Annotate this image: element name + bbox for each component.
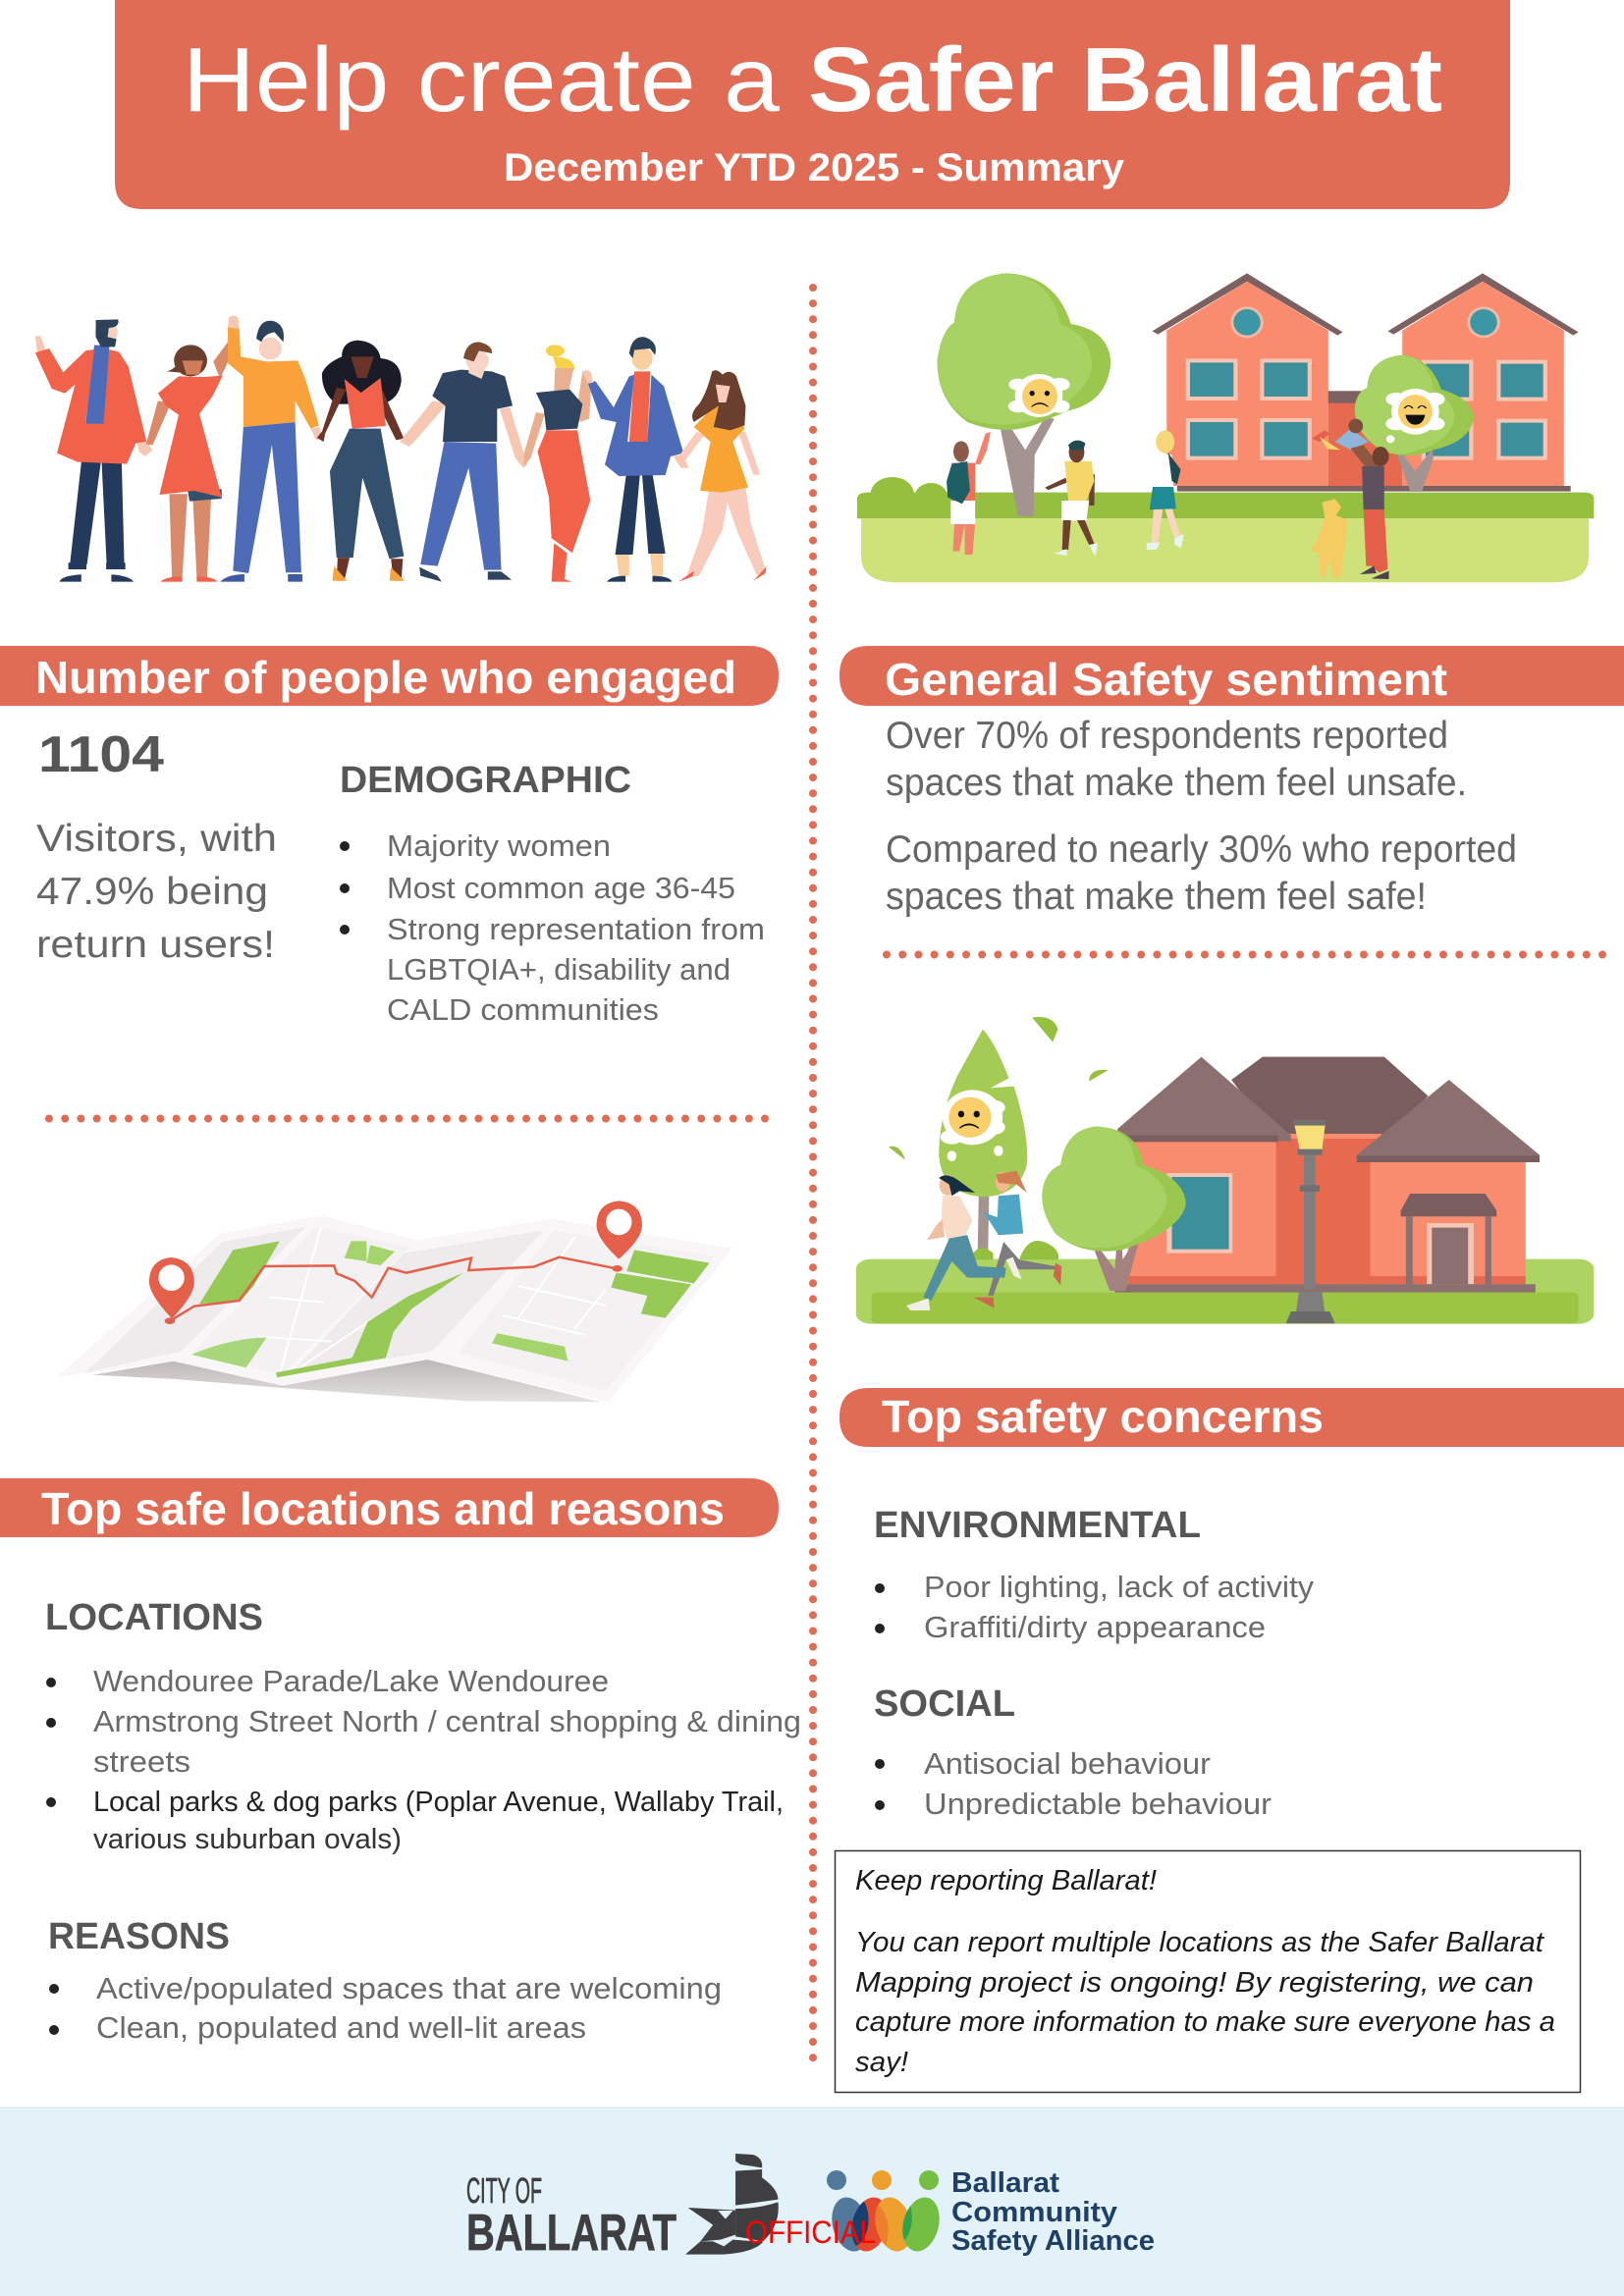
ground [857,477,1594,582]
reasons list: Active/populated spaces that are welcoming [96,1971,722,2005]
environmental concerns: Graffiti/dirty appearance [924,1610,1266,1644]
reasons list: REASONS [48,1916,230,1957]
callout: keep reporting [835,1851,1581,2093]
subtitle: December YTD 2025 - Summary [504,146,1125,189]
title: Help create a [183,28,780,131]
header banner [115,0,1510,209]
demographic list: LGBTQIA+, disability and [387,952,731,987]
locations list: Armstrong Street North / central shopping & dining [93,1704,801,1738]
footer band [0,2107,1624,2296]
map paper [57,1215,732,1402]
demographic list: Most common age 36-45 [387,871,735,905]
callout: keep reporting: say! [855,2047,908,2078]
locations list: streets [93,1744,190,1779]
logo: City of Ballarat [466,2154,779,2262]
locations list: Wendouree Parade/Lake Wendouree [93,1664,609,1698]
house right [1387,273,1579,486]
person 7 [582,337,688,582]
callout: keep reporting: You can report multiple locations as the Safer Ballarat [855,1927,1545,1958]
sentiment text: spaces that make them feel safe! [886,876,1427,918]
locations list [45,1597,801,1855]
sad face icon [1008,374,1070,417]
person 5 [400,342,527,582]
callout: keep reporting: Mapping project is ongoing! By registering, we can [855,1967,1534,1999]
person 8 [678,370,767,582]
locations list: various suburban ovals) [93,1824,402,1855]
social concerns: Unpredictable behaviour [924,1787,1272,1821]
sentiment text: Over 70% of respondents reported [886,715,1448,757]
lawn [856,1259,1594,1324]
logo: City of Ballarat: BALLARAT [466,2205,677,2262]
section heading: safety concerns [839,1388,1624,1447]
demographic list: CALD communities [387,992,659,1027]
callout: keep reporting: Keep reporting Ballarat! [855,1865,1157,1896]
reasons list [48,1916,722,2045]
statistic: visitors: 1104 [38,726,164,783]
map parks [191,1241,710,1377]
house [1115,1057,1540,1293]
logo: City of Ballarat: CITY OF [466,2170,542,2211]
locations list: Local parks & dog parks (Poplar Avenue, Wallaby Trail, [93,1787,784,1818]
social concerns: SOCIAL [874,1683,1015,1725]
person 3 [220,315,322,582]
map shadow [93,1360,601,1402]
logo: Ballarat Community Safety Alliance: Community [951,2197,1117,2228]
person in teal skirt [1147,430,1184,550]
dog [1310,499,1348,577]
statistic: visitors: 47.9% being [36,871,268,913]
adult lifting a child [1312,419,1389,579]
person 6 [524,345,591,582]
logo: Ballarat Community Safety Alliance: Safety Alliance [951,2225,1155,2257]
statistic: visitors [36,726,277,966]
sentiment text: Compared to nearly 30% who reported [886,828,1517,871]
section heading: safety concerns: Top safety concerns [882,1391,1324,1442]
tree left with sad thought [938,273,1110,516]
section heading: engaged: Number of people who engaged [35,652,736,703]
illustration: house, lamp post and joggers [856,1017,1594,1324]
section heading: sentiment [839,646,1624,706]
left pin [149,1257,194,1324]
person in yellow shirt [1045,441,1098,557]
demographic list: Majority women [387,828,611,863]
section heading: safe locations: Top safe locations and reasons [41,1483,725,1534]
social concerns [874,1683,1272,1821]
illustration: houses, trees and people in a park [857,273,1594,582]
statistic: visitors: return users! [36,924,275,966]
person with backpack [947,432,991,555]
person 4 [317,341,405,581]
route line [170,1257,617,1321]
joggers [906,1171,1061,1310]
logo: Ballarat Community Safety Alliance [827,2167,1155,2257]
demographic list: Strong representation from [387,912,765,946]
reasons list: Clean, populated and well-lit areas [96,2010,586,2045]
logo: Ballarat Community Safety Alliance: Ballarat [951,2167,1059,2199]
tall tree with sad thought [939,1029,1027,1250]
illustration: group of people holding hands [35,315,767,582]
environmental concerns: ENVIRONMENTAL [874,1505,1201,1546]
environmental concerns: Poor lighting, lack of activity [924,1570,1315,1604]
demographic list: DEMOGRAPHIC [340,760,631,801]
illustration: folded map with pins [57,1201,732,1402]
sentiment text [886,715,1517,918]
connecting block [1328,391,1402,486]
person 1 [35,319,153,582]
callout: keep reporting: capture more information to make sure everyone has a [855,2006,1555,2038]
person 2 [146,342,229,582]
environmental concerns [874,1505,1315,1644]
tree right with happy thought [1355,355,1474,491]
title: Safer Ballarat [808,28,1442,131]
statistic: visitors: Visitors, with [36,818,277,860]
right pin [597,1201,642,1272]
demographic list [340,760,765,1027]
official marking: OFFICIAL [745,2215,876,2250]
section heading: sentiment: General Safety sentiment [885,654,1447,705]
lamp post [1286,1121,1335,1323]
falling leaves [889,1017,1109,1160]
round bush tree [1042,1127,1186,1291]
house left [1153,273,1343,486]
locations list: LOCATIONS [45,1597,263,1638]
sentiment text: spaces that make them feel unsafe. [886,762,1467,804]
happy face icon [1385,389,1444,443]
sad face icon [941,1090,1005,1145]
social concerns: Antisocial behaviour [924,1746,1211,1781]
